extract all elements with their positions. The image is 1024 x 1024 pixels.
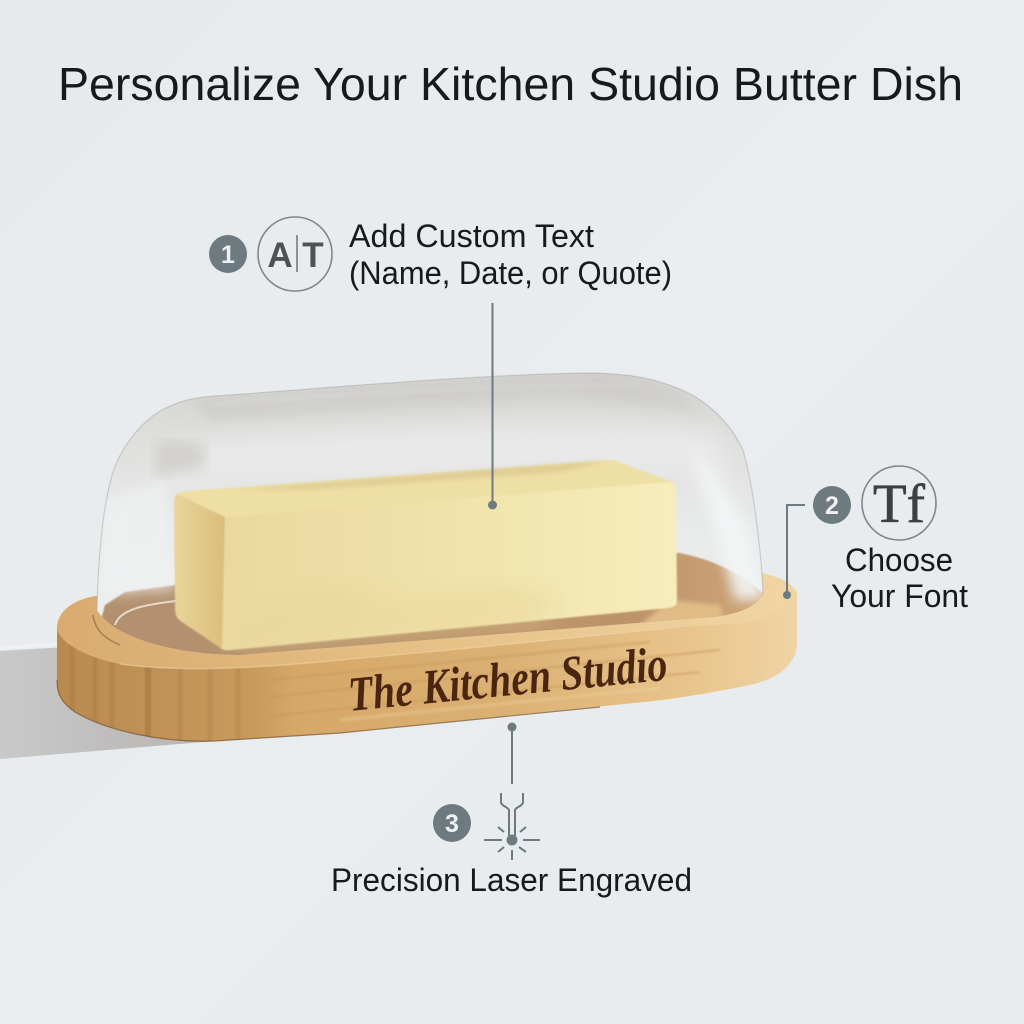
label text: Choose [845, 542, 953, 578]
leader line to engraving [508, 722, 516, 784]
number badge 2 [813, 486, 851, 524]
glass dome [90, 373, 770, 670]
wood seen through the glass [101, 552, 763, 655]
number badge 2: 2 [825, 492, 839, 520]
number badge 1 [209, 235, 247, 273]
label text [831, 542, 968, 614]
icon: laser engraver [484, 793, 540, 860]
label text [349, 218, 672, 291]
label text: (Name, Date, or Quote) [349, 255, 672, 291]
cast shadow [0, 644, 215, 759]
label text: Your Font [831, 578, 968, 614]
butter dish illustration [57, 373, 797, 745]
icon: Tf font: Tf [873, 473, 926, 534]
icon: Tf font [862, 466, 936, 540]
bamboo base [56, 572, 797, 742]
icon: A|T text: A [267, 236, 293, 275]
icon: A|T text: T [302, 236, 324, 275]
callout 2: font [783, 466, 968, 614]
label text: Add Custom Text [349, 218, 594, 254]
icon: A|T text [258, 217, 332, 291]
leader line to butter [488, 303, 497, 510]
title: Personalize Your Kitchen Studio Butter Dish [58, 58, 963, 110]
engraved brand name: The Kitchen Studio [346, 636, 670, 722]
number badge 1: 1 [221, 241, 235, 269]
number badge 3: 3 [445, 810, 459, 838]
leader line to base [783, 505, 805, 599]
callout 3: laser engraving [331, 722, 692, 898]
callout 1: custom text [209, 217, 672, 510]
butter stick [174, 460, 677, 650]
number badge 3 [433, 804, 471, 842]
label text: Precision Laser Engraved [331, 862, 692, 898]
